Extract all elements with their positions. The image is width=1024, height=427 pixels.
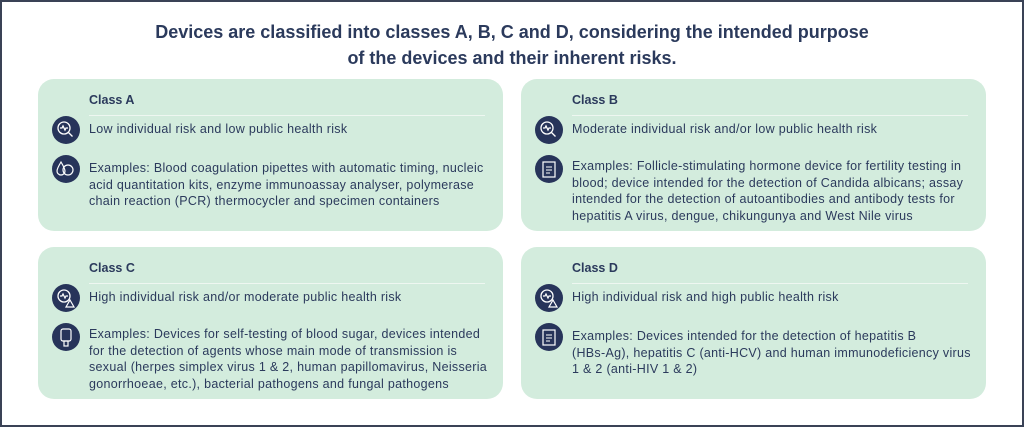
- icon: glucose meter: [52, 323, 80, 351]
- examples text: sexual (herpes simplex virus 1 & 2, human papillomavirus, Neisseria: [89, 360, 487, 374]
- icon: magnifier: [535, 116, 563, 144]
- examples text: [89, 161, 484, 208]
- examples text: gonorrhoeae, etc.), bacterial pathogens and fungal pathogens: [89, 376, 449, 390]
- risk text: Moderate individual risk and/or low public health risk: [572, 122, 877, 136]
- heading: class B: Class B: [572, 93, 618, 107]
- panel: class C: [38, 247, 503, 399]
- icon: clipboard: [535, 155, 563, 183]
- title: Devices are classified into classes A, B, C and D, considering the intended purpose: [155, 22, 869, 42]
- examples text: 1 & 2 (anti-HIV 1 & 2): [572, 362, 697, 376]
- icon: magnifier warning: [535, 284, 563, 312]
- title: [155, 22, 869, 68]
- risk text: High individual risk and/or moderate public health risk: [89, 290, 401, 304]
- examples text: Examples: Devices for self-testing of blood sugar, devices intended: [89, 327, 480, 341]
- examples text: for the detection of agents whose main mode of transmission is: [89, 344, 457, 358]
- panel: class B: [521, 79, 986, 231]
- examples text: (HBs-Ag), hepatitis C (anti-HCV) and human immunodeficiency virus: [572, 346, 971, 360]
- examples text: intended for the detection of autoantibodies and antibody tests for: [572, 192, 955, 206]
- examples text: Examples: Follicle-stimulating hormone device for fertility testing in: [572, 159, 961, 173]
- title: of the devices and their inherent risks.: [347, 48, 677, 68]
- examples text: [89, 327, 487, 390]
- panel: class D: [521, 247, 986, 399]
- examples text: Examples: Blood coagulation pipettes with automatic timing, nucleic: [89, 161, 484, 175]
- icon: magnifier warning: [52, 284, 80, 312]
- examples text: hepatitis A virus, dengue, chikungunya and West Nile virus: [572, 208, 913, 222]
- heading: class A: Class A: [89, 93, 134, 107]
- heading: class C: Class C: [89, 261, 135, 275]
- examples text: chain reaction (PCR) thermocycler and specimen containers: [89, 194, 440, 208]
- icon: clipboard: [535, 323, 563, 351]
- examples text: acid quantitation kits, enzyme immunoassay analyser, polymerase: [89, 178, 474, 192]
- risk text: Low individual risk and low public health risk: [89, 122, 347, 136]
- examples text: [572, 329, 971, 376]
- examples text: [572, 159, 963, 222]
- icon: magnifier: [52, 116, 80, 144]
- examples text: blood; device intended for the detection of Candida albicans; assay: [572, 176, 963, 190]
- risk text: High individual risk and high public health risk: [572, 290, 839, 304]
- panel: class A: [38, 79, 503, 231]
- icon: drop: [52, 155, 80, 183]
- heading: class D: Class D: [572, 261, 618, 275]
- examples text: Examples: Devices intended for the detection of hepatitis B: [572, 329, 916, 343]
